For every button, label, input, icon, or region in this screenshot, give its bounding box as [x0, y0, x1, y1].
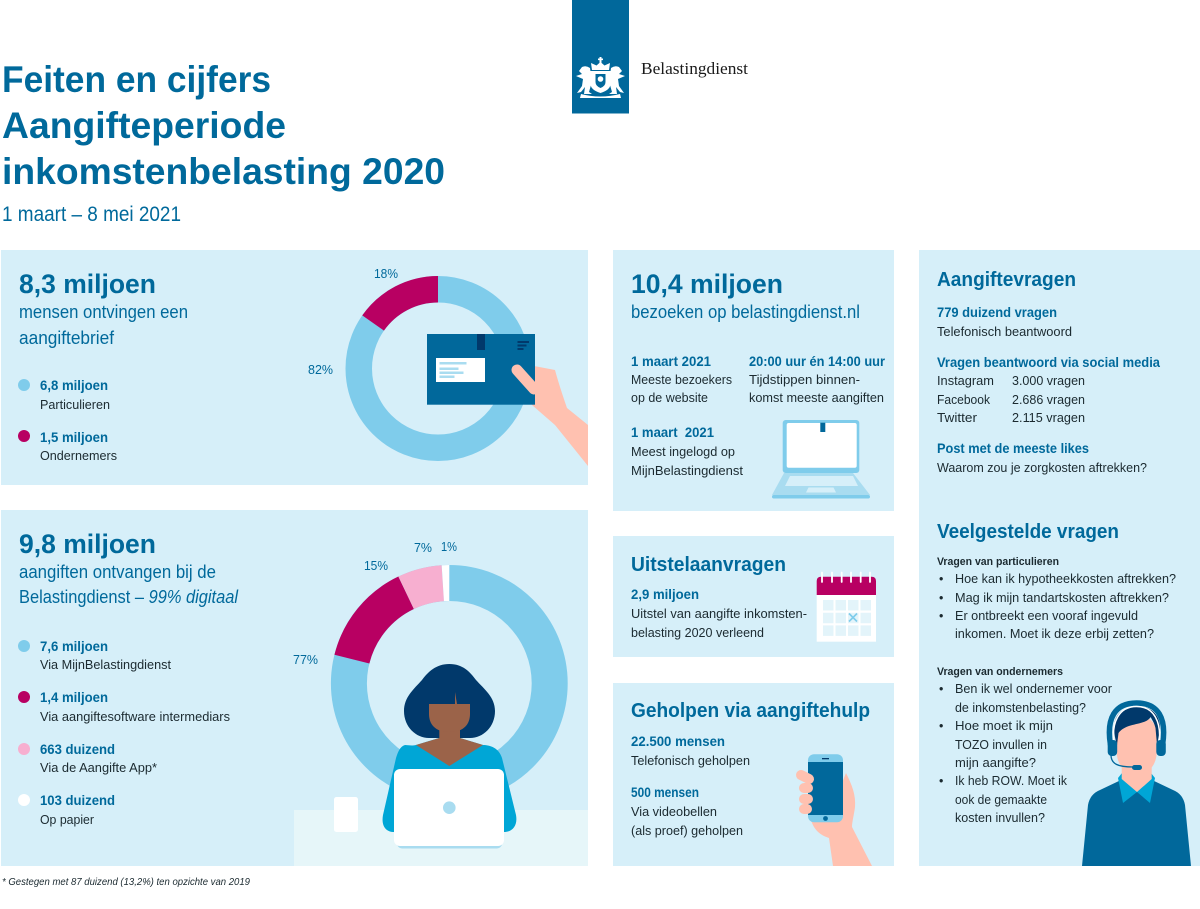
panel: aangiftehulp	[613, 683, 894, 866]
text: social media: Instagram	[937, 374, 994, 388]
heading: 9,8 miljoen	[19, 529, 239, 607]
legend: MijnBelastingdienst: Via MijnBelastingdienst	[40, 658, 172, 672]
list: vragen van particulieren: inkomen. Moet ik deze erbij zetten?	[955, 627, 1154, 641]
heading: Geholpen via aangiftehulp: Geholpen via aangiftehulp	[631, 700, 870, 722]
text: uitstel: belasting 2020 verleend	[631, 626, 764, 640]
legend: Ondernemers: 1,5 miljoen	[40, 429, 108, 445]
text: social media: 2.115 vragen	[1012, 411, 1085, 425]
legend: papier	[18, 792, 115, 827]
heading: 8,3 miljoen	[19, 269, 188, 348]
list: vragen van ondernemers: Ben ik wel ondernemer voor	[955, 682, 1112, 696]
panel: aangiftebrief	[1, 250, 588, 485]
icon: calendar	[817, 572, 876, 642]
text: tijdstippen: Tijdstippen binnen-	[749, 373, 860, 387]
text: meest ingelogd: Meest ingelogd op	[631, 445, 735, 459]
legend: papier: 103 duizend	[40, 792, 115, 808]
title: Aangifteperiode	[2, 105, 286, 146]
logo: Belastingdienst	[572, 0, 748, 114]
icon: hand holding envelope	[427, 334, 588, 466]
list: vragen van particulieren: •	[939, 591, 943, 605]
text: meest ingelogd: MijnBelastingdienst	[631, 464, 744, 478]
text: telefonisch beantwoord: 779 duizend vragen	[937, 304, 1057, 320]
list: vragen van ondernemers: Vragen van ondernemers	[937, 666, 1063, 678]
heading: 8,3 miljoen: aangiftebrief	[19, 328, 115, 348]
legend: Ondernemers	[18, 429, 117, 463]
label: 7%: 7%	[414, 540, 432, 555]
text: meeste likes: Waarom zou je zorgkosten aftrekken?	[937, 461, 1147, 475]
list: vragen van ondernemers	[937, 666, 1112, 825]
text: uitstel: 2,9 miljoen	[631, 586, 699, 602]
list: vragen van ondernemers: ook de gemaakte	[955, 793, 1047, 807]
list: vragen van ondernemers: Hoe moet ik mijn	[955, 719, 1053, 733]
donut chart: channels	[349, 583, 550, 784]
title	[2, 59, 445, 192]
panel: aangiften	[1, 510, 588, 866]
icon: cup	[334, 797, 358, 832]
label: 18%: 18%	[374, 266, 398, 281]
list: vragen van particulieren: Mag ik mijn tandartskosten aftrekken?	[955, 591, 1169, 605]
legend: intermediairs: Via aangiftesoftware intermediars	[40, 710, 230, 724]
text: meest ingelogd: 1 maart 2021	[631, 424, 714, 440]
legend: MijnBelastingdienst	[18, 638, 172, 672]
list: vragen van ondernemers: Ik heb ROW. Moet ik	[955, 774, 1068, 788]
text: meeste bezoekers: Meeste bezoekers	[631, 373, 732, 387]
text: tijdstippen	[749, 353, 885, 405]
list: vragen van ondernemers: •	[939, 719, 943, 733]
legend: Aangifte App: 663 duizend	[40, 741, 115, 757]
illustration: woman with laptop	[383, 664, 516, 848]
text: meeste bezoekers: 1 maart 2021	[631, 353, 711, 369]
list: vragen van particulieren: Vragen van particulieren	[937, 556, 1059, 568]
label: 15%: 15%	[364, 558, 388, 573]
footnote: * Gestegen met 87 duizend (13,2%) ten opzichte van 2019	[2, 876, 250, 888]
list: vragen van particulieren: Hoe kan ik hypotheekkosten aftrekken?	[955, 572, 1176, 586]
text: meeste likes	[937, 440, 1147, 475]
text: telefonisch	[631, 733, 750, 768]
desk	[294, 810, 588, 866]
text: social media	[937, 354, 1160, 425]
title: inkomstenbelasting 2020	[2, 151, 445, 192]
panel: uitstelaanvragen	[613, 536, 894, 657]
list: vragen van particulieren: •	[939, 609, 943, 623]
icon: laptop	[772, 420, 870, 498]
heading: 10,4 miljoen: bezoeken op belastingdienst.nl	[631, 302, 860, 322]
text: uitstel: Uitstel van aangifte inkomsten-	[631, 607, 807, 621]
text: telefonisch beantwoord	[937, 304, 1072, 339]
icon: royal coat of arms	[576, 57, 625, 98]
donut chart: recipients	[359, 289, 517, 448]
text: social media: Twitter	[937, 411, 977, 425]
legend: Aangifte App: Via de Aangifte App*	[40, 761, 157, 775]
legend: MijnBelastingdienst: 7,6 miljoen	[40, 638, 108, 654]
label: 1%: 1%	[441, 539, 457, 554]
legend: Ondernemers: Ondernemers	[40, 449, 117, 463]
legend: Particulieren: Particulieren	[40, 398, 110, 412]
heading: 9,8 miljoen: 9,8 miljoen	[19, 529, 156, 559]
subtitle: period: 1 maart – 8 mei 2021	[2, 203, 181, 226]
list: vragen van ondernemers: mijn aangifte?	[955, 756, 1036, 770]
text: telefonisch: Telefonisch geholpen	[631, 754, 750, 768]
heading: 10,4 miljoen: 10,4 miljoen	[631, 269, 783, 299]
list: vragen van ondernemers: kosten invullen?	[955, 811, 1045, 825]
text: tijdstippen: 20:00 uur én 14:00 uur	[749, 353, 885, 369]
text: meeste bezoekers	[631, 353, 732, 405]
text: videobellen: Via videobellen	[631, 805, 717, 819]
text: social media: 2.686 vragen	[1012, 393, 1085, 407]
legend: papier: Op papier	[40, 813, 94, 827]
heading: Veelgestelde vragen: Veelgestelde vragen	[937, 521, 1119, 543]
logo wordmark: Belastingdienst	[641, 59, 748, 78]
heading: 8,3 miljoen: 8,3 miljoen	[19, 269, 156, 299]
text: tijdstippen: komst meeste aangiften	[749, 391, 884, 405]
text: social media: 3.000 vragen	[1012, 374, 1085, 388]
text: meeste bezoekers: op de website	[631, 391, 708, 405]
text: telefonisch beantwoord: Telefonisch beantwoord	[937, 325, 1072, 339]
list: vragen van particulieren: •	[939, 572, 943, 586]
text: meeste likes: Post met de meeste likes	[937, 440, 1089, 456]
heading: 9,8 miljoen: Belastingdienst – 99% digitaal	[19, 587, 239, 607]
label: 82%: 82%	[308, 362, 333, 377]
list: vragen van particulieren	[937, 556, 1176, 641]
text: videobellen	[631, 784, 743, 838]
text: social media: Facebook	[937, 393, 991, 407]
legend: Aangifte App	[18, 741, 157, 775]
title: Feiten en cijfers	[2, 59, 271, 100]
icon: hand with phone	[801, 754, 872, 866]
text: meest ingelogd	[631, 424, 744, 478]
list: vragen van ondernemers: •	[939, 682, 943, 696]
text: uitstel	[631, 586, 807, 640]
legend: intermediairs: 1,4 miljoen	[40, 689, 108, 705]
heading: Uitstelaanvragen: Uitstelaanvragen	[631, 554, 786, 576]
text: videobellen: 500 mensen	[631, 784, 699, 800]
illustration: helpdesk man with headset	[1082, 703, 1191, 866]
legend: Particulieren: 6,8 miljoen	[40, 377, 108, 393]
list: vragen van ondernemers: de inkomstenbelasting?	[955, 701, 1086, 715]
panel: bezoeken website	[613, 250, 894, 511]
heading: 9,8 miljoen: aangiften ontvangen bij de	[19, 562, 216, 582]
heading: 10,4 miljoen	[631, 269, 860, 322]
heading: Aangiftevragen: Aangiftevragen	[937, 269, 1076, 291]
panel: vragen	[919, 250, 1200, 866]
list: vragen van particulieren: Er ontbreekt een vooraf ingevuld	[955, 609, 1138, 623]
list: vragen van ondernemers: •	[939, 774, 943, 788]
legend: intermediairs	[18, 689, 230, 724]
text: videobellen: (als proef) geholpen	[631, 824, 743, 838]
label: 77%: 77%	[293, 652, 318, 667]
text: social media: Vragen beantwoord via social media	[937, 354, 1160, 370]
list: vragen van ondernemers: TOZO invullen in	[955, 738, 1047, 752]
text: telefonisch: 22.500 mensen	[631, 733, 725, 749]
heading: 8,3 miljoen: mensen ontvingen een	[19, 302, 188, 322]
legend: Particulieren	[18, 377, 110, 412]
